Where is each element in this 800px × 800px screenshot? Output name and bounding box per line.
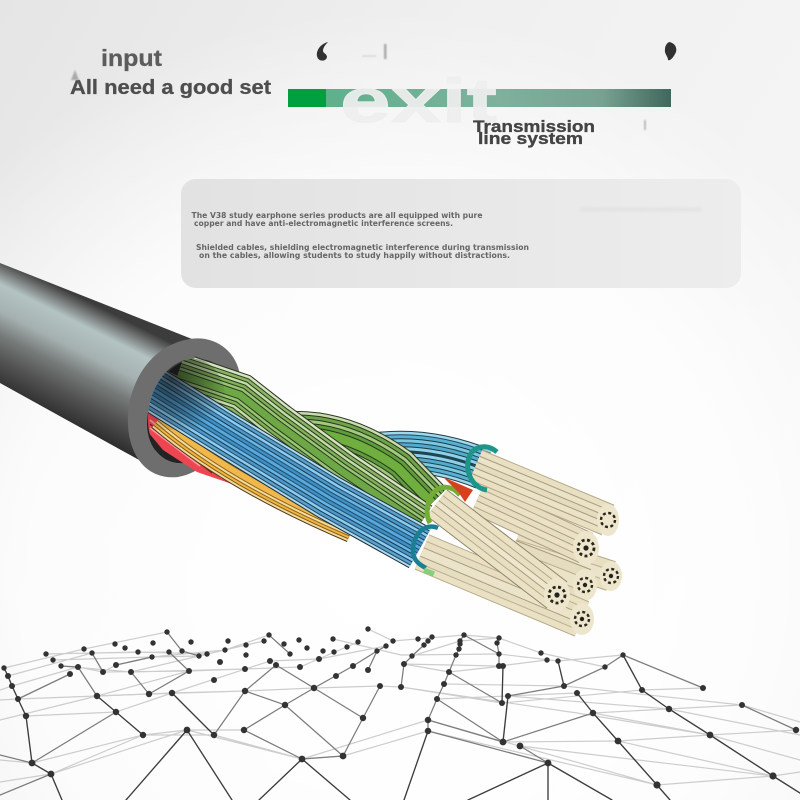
- cable jacket: [0, 263, 240, 477]
- mesh: nodes: [1, 626, 799, 789]
- conductor A: [476, 465, 619, 536]
- twisted wire bundles: [140, 350, 484, 548]
- watermark word: exit: exit: [340, 67, 497, 136]
- blurred marks above the bar: [71, 42, 676, 130]
- yellow wire bundle: [160, 418, 352, 530]
- label: Transmission line system: Transmission: [473, 118, 595, 136]
- mesh: medium lines: [0, 632, 796, 795]
- copper conductors: [422, 465, 622, 635]
- description text: on the cables, allowing students to study happily without distractions.: [199, 251, 510, 260]
- tan strand in cavity: [168, 372, 177, 377]
- label: Transmission line system: [473, 118, 595, 148]
- progress bar: [288, 89, 671, 107]
- red wire bundle: [146, 410, 232, 484]
- panel: description: [181, 179, 741, 288]
- front green wire bundle: [178, 374, 420, 524]
- conductor E: [510, 556, 597, 601]
- jacket inner cavity: [147, 359, 226, 463]
- rear teal wire bundle: [378, 452, 484, 469]
- description text: The V38 study earphone series products are all equipped with pure: [192, 211, 482, 220]
- label: Transmission line system: line system: [478, 130, 583, 148]
- insulation collars: [413, 447, 497, 574]
- mesh: dark near lines: [4, 655, 800, 800]
- jacket end ring: [128, 338, 240, 477]
- conductor C: [437, 503, 570, 612]
- rear green wire bundle: [290, 432, 432, 503]
- description text: copper and have anti-electromagnetic interference screens.: [194, 219, 453, 228]
- mesh: light far lines: [0, 629, 800, 785]
- ghost text band: [580, 208, 702, 211]
- heading: All need a good set: All need a good set: [70, 77, 271, 99]
- conductor B: [478, 498, 599, 565]
- description text: [192, 211, 529, 260]
- conductor F: [515, 545, 622, 591]
- blue wire bundle: [148, 386, 420, 548]
- heading: input: input: [101, 45, 162, 71]
- network mesh: [0, 626, 800, 800]
- conductor D: [422, 552, 594, 635]
- description text: Shielded cables, shielding electromagnetic interference during transmission: [196, 243, 529, 252]
- shade inside cable mouth: [148, 358, 224, 430]
